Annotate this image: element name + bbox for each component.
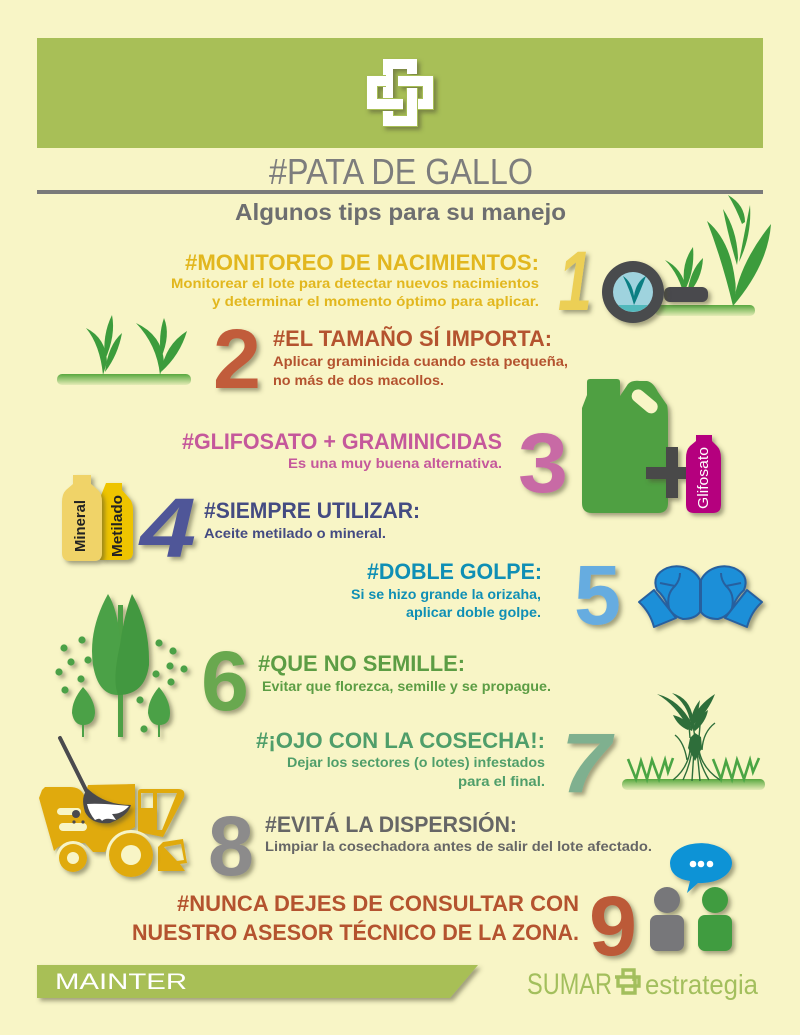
tip 7 text: Dejar los sectores (o lotes) infestados	[287, 755, 545, 770]
number 5: 5	[574, 548, 621, 642]
tip 2 text: Aplicar graminicida cuando esta pequeña,	[273, 354, 568, 369]
icon: interlaced logo	[372, 64, 428, 121]
closing call to action: NUESTRO ASESOR TÉCNICO DE LA ZONA.	[132, 920, 579, 945]
icon: grass tuft	[622, 693, 765, 790]
header band	[37, 38, 763, 148]
icon: jug plus glifosato bottle	[582, 379, 721, 513]
tip 8 text: #EVITÁ LA DISPERSIÓN:	[265, 812, 517, 837]
icon: seedlings on ground	[57, 315, 191, 385]
tip 7 text: para el final.	[458, 774, 545, 789]
subtitle: Algunos tips para su manejo	[235, 199, 566, 225]
tip 7 text	[256, 728, 545, 789]
tip 5 text: #DOBLE GOLPE:	[367, 559, 542, 584]
tip 1 text: #MONITOREO DE NACIMIENTOS:	[185, 250, 539, 275]
label: Mineral: Mineral	[73, 500, 89, 552]
footer logo: SUMAR estrategia: estrategia	[645, 969, 758, 1000]
footer banner: MAINTER: MAINTER	[55, 969, 187, 994]
tip 5 text: Si se hizo grande la orizaha,	[351, 587, 541, 602]
tip 2 text: #EL TAMAÑO SÍ IMPORTA:	[273, 326, 552, 351]
icon: combine harvester with broom	[39, 738, 187, 880]
number 1: 1	[558, 234, 592, 328]
number 3: 3	[518, 416, 568, 510]
closing call to action	[132, 891, 579, 945]
footer logo: SUMAR estrategia: SUMAR	[527, 968, 612, 1001]
tip 4 text: Aceite metilado o mineral.	[204, 526, 386, 541]
tip 6 text	[258, 651, 551, 694]
tip 3 text: #GLIFOSATO + GRAMINICIDAS	[182, 429, 502, 454]
number 9: 9	[589, 879, 637, 973]
footer logo: SUMAR estrategia	[527, 968, 758, 1001]
tip 5 text	[351, 559, 542, 620]
icon: boxing gloves	[639, 566, 762, 627]
title: #PATA DE GALLO	[269, 151, 533, 192]
tip 5 text: aplicar doble golpe.	[406, 605, 541, 620]
tip 4 text	[204, 498, 420, 541]
tip 3 text: Es una muy buena alternativa.	[288, 456, 502, 471]
tip 2 text	[273, 326, 568, 388]
tip 6 text: #QUE NO SEMILLE:	[258, 651, 465, 676]
icon: magnifier over plants	[602, 195, 771, 323]
tip 6 text: Evitar que florezca, semille y se propague.	[262, 679, 551, 694]
label: Glifosato: Glifosato	[696, 447, 712, 509]
tip 2 text: no más de dos macollos.	[273, 373, 444, 388]
tip 8 text	[265, 812, 652, 854]
tip 8 text: Limpiar la cosechadora antes de salir del lote afectado.	[265, 839, 652, 854]
number 2: 2	[213, 312, 261, 406]
tip 4 text: #SIEMPRE UTILIZAR:	[204, 498, 420, 523]
tip 1 text: Monitorear el lote para detectar nuevos nacimientos	[171, 276, 539, 291]
footer banner: MAINTER	[37, 965, 478, 998]
tip 3 text	[182, 429, 502, 471]
icon: seeding plant with dots	[55, 594, 188, 737]
number 8: 8	[208, 799, 254, 893]
tip 1 text: y determinar el momento óptimo para aplicar.	[212, 294, 539, 309]
icon: oil bottles	[62, 475, 133, 561]
tip 1 text	[171, 250, 539, 309]
closing call to action: #NUNCA DEJES DE CONSULTAR CON	[177, 891, 579, 916]
number 4: 4	[138, 481, 196, 575]
number 7: 7	[561, 716, 615, 810]
tip 7 text: #¡OJO CON LA COSECHA!:	[256, 728, 545, 753]
label: Metilado: Metilado	[110, 495, 126, 557]
number 6: 6	[201, 634, 249, 728]
icon: two people talking	[650, 843, 732, 951]
